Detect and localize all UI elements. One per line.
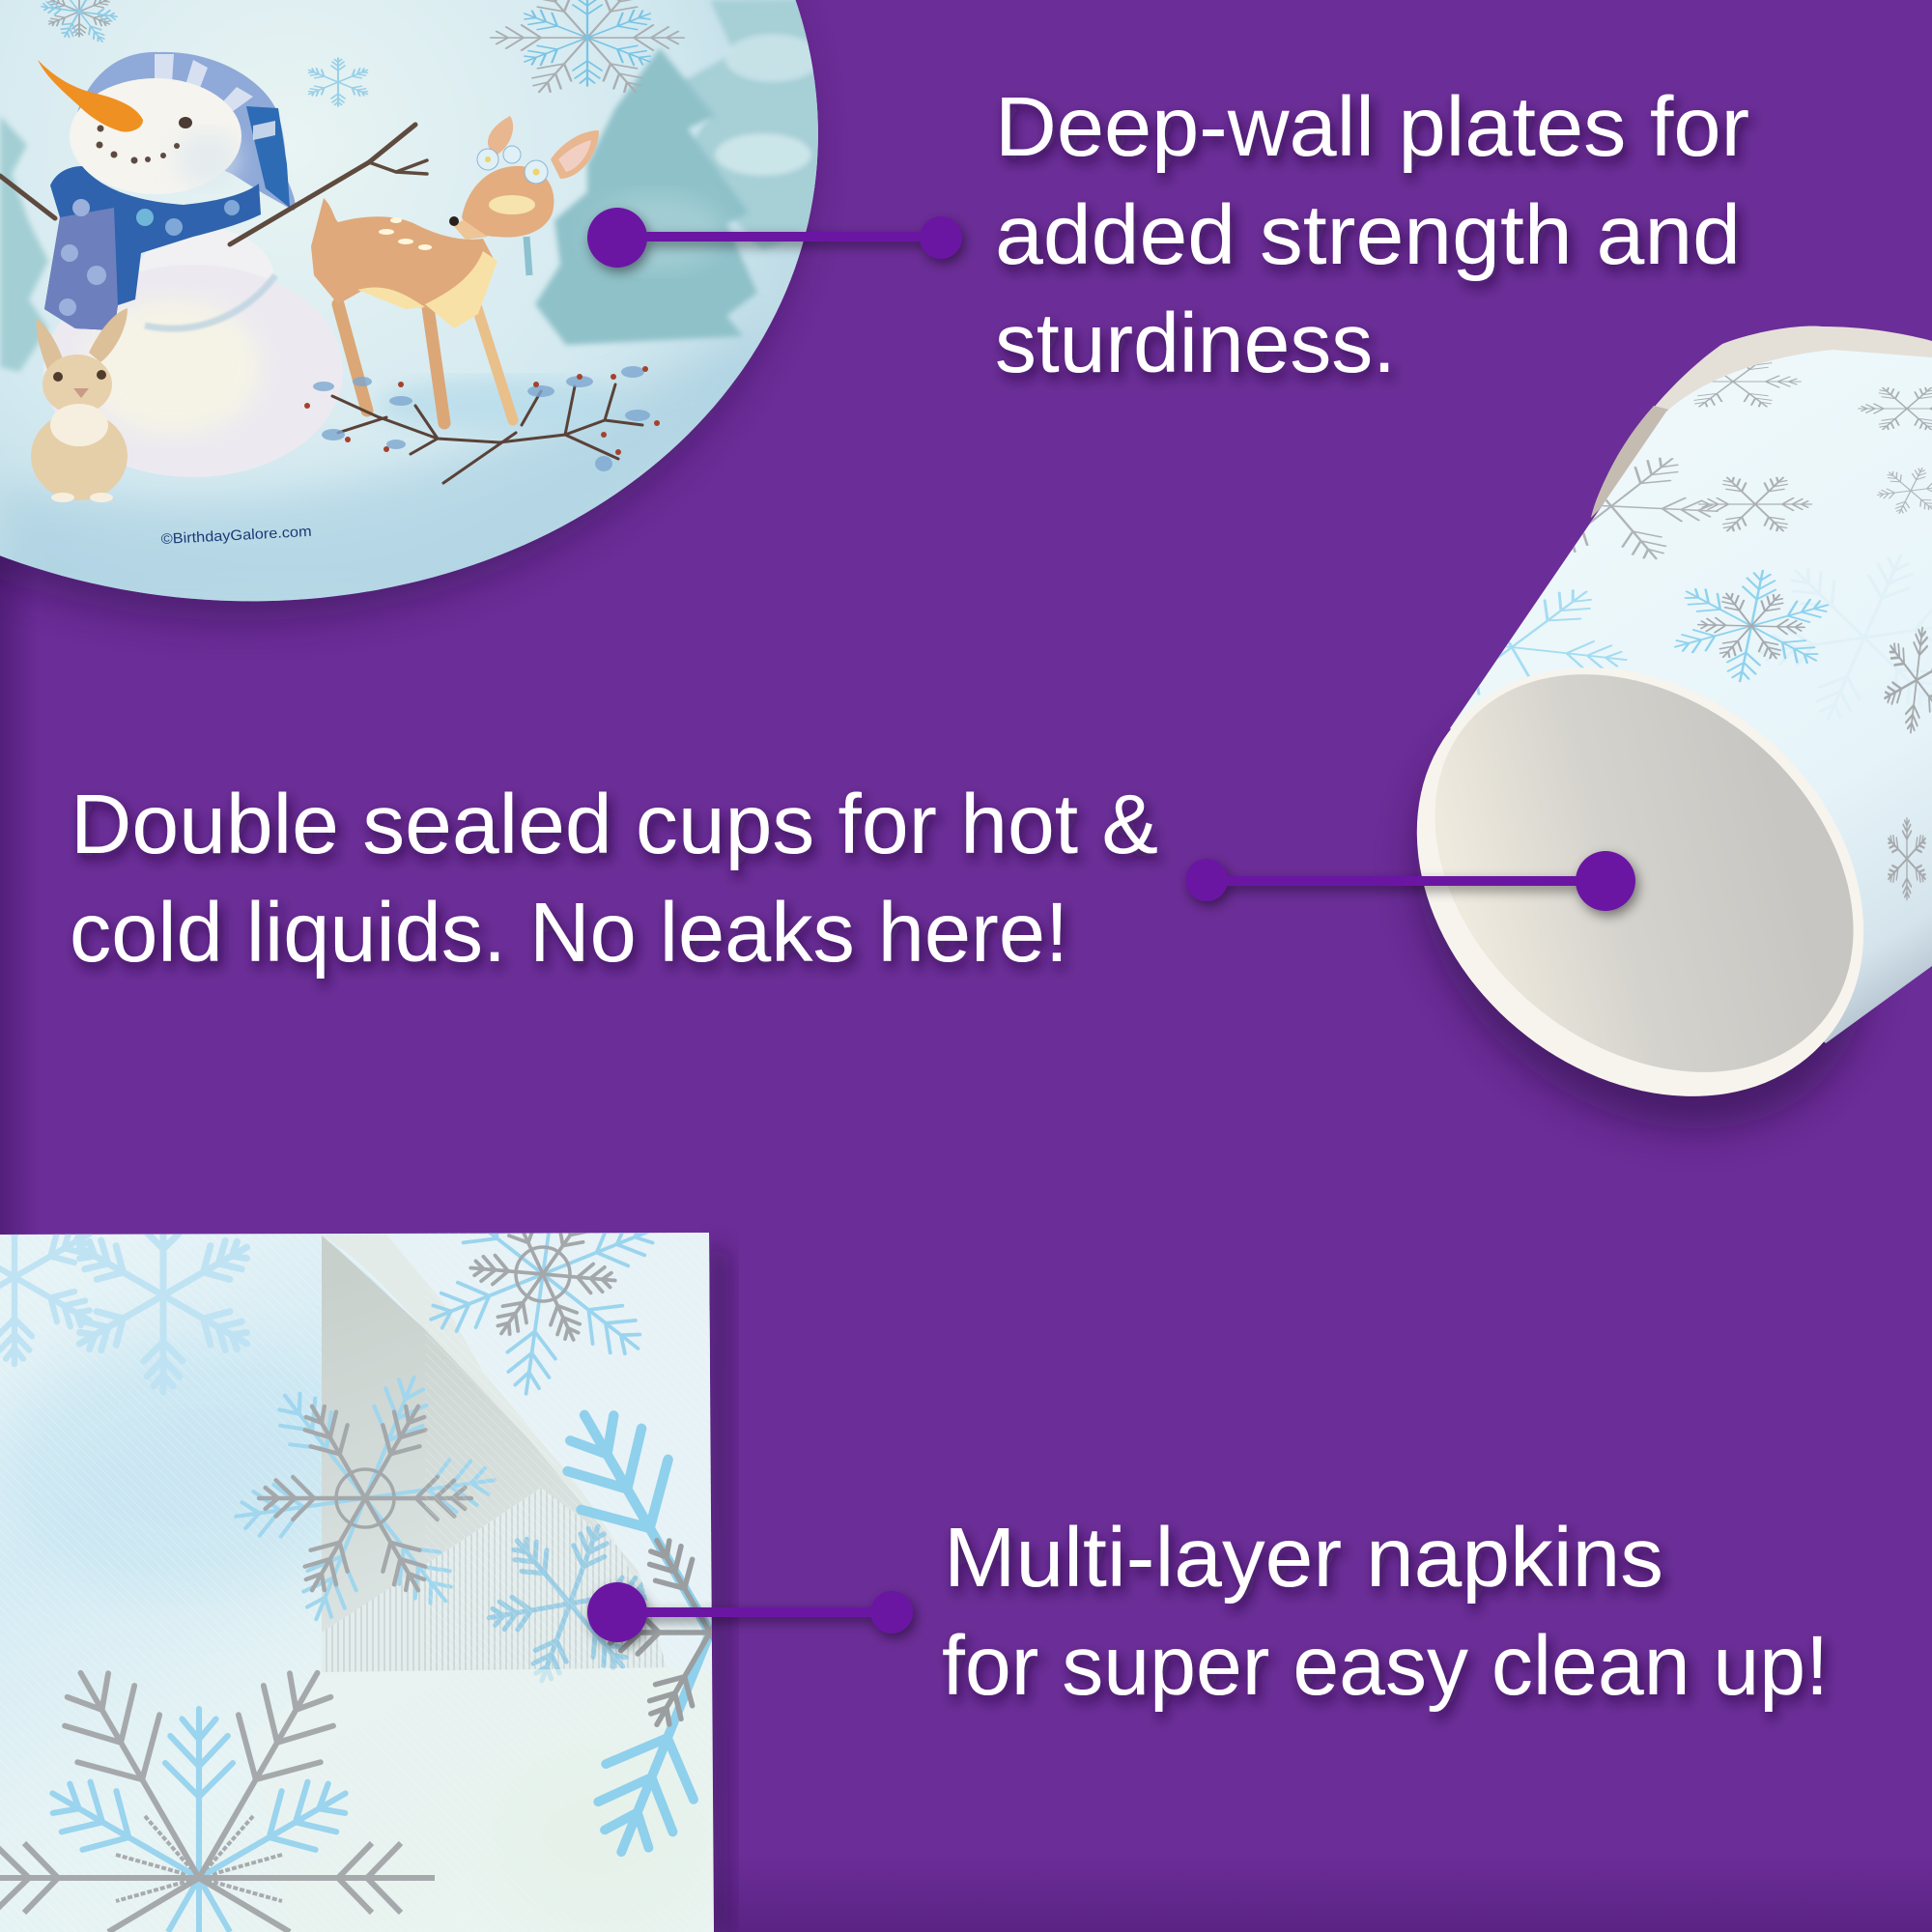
plate left tree <box>0 116 48 372</box>
text: napkins <box>942 1511 1829 1713</box>
copyright text on plate: ©BirthdayGalore.com <box>160 524 312 548</box>
napkin <box>0 1233 738 1932</box>
plate back tree <box>676 0 821 251</box>
napkin folded flap <box>322 1233 710 1667</box>
napkin inner layer <box>322 1236 676 1672</box>
text: cups <box>70 778 1158 980</box>
cup snowflakes <box>1476 362 1932 900</box>
cup <box>1400 327 1932 1146</box>
napkin right snowflake <box>541 1390 852 1870</box>
text: cups: cold liquids. No leaks here! <box>70 886 1068 980</box>
rabbit <box>31 308 128 502</box>
napkin snowflakes top layer <box>0 1190 257 1392</box>
napkin centre snowflake <box>200 1330 530 1666</box>
cup body <box>1450 350 1932 1043</box>
deer <box>311 116 599 423</box>
text: plates <box>995 80 1749 390</box>
connector: plate <box>587 208 962 268</box>
berry branches <box>304 366 660 483</box>
connector: napkin <box>587 1582 913 1642</box>
text: plates: added strength and <box>995 188 1741 282</box>
cup rim <box>1591 327 1932 518</box>
plate <box>0 0 823 636</box>
text: napkins: for super easy clean up! <box>942 1619 1829 1713</box>
text: plates: sturdiness. <box>995 297 1396 390</box>
napkin lower layer <box>251 1667 714 1932</box>
cup base <box>1331 579 1932 1185</box>
plate lower watercolor wash <box>0 342 759 601</box>
plate front tree <box>535 48 757 345</box>
snowman <box>0 52 427 477</box>
plate snowflakes <box>31 0 717 123</box>
text: plates: Deep-wall plates for <box>995 80 1749 174</box>
text: napkins: Multi-layer napkins <box>944 1511 1663 1605</box>
napkin bottom snowflake <box>0 1649 435 1932</box>
connector: cup <box>1185 851 1635 911</box>
text: cups: Double sealed cups for hot & <box>71 778 1158 871</box>
